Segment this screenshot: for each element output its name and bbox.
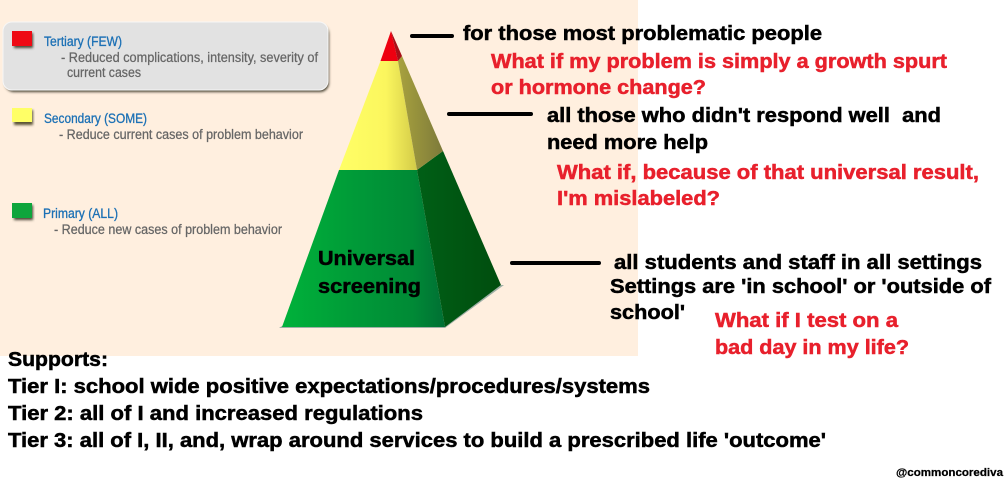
legend highlight box: tertiary — [3, 22, 329, 92]
text block: supports: Tier 2: all of I and increased regulations — [8, 403, 423, 425]
callout: mislabeled question: What if, because of that universal result, — [557, 162, 979, 184]
primary text — [43, 206, 282, 237]
tertiary text: Tertiary (FEW) — [44, 34, 122, 49]
text: bottom tier note — [610, 252, 991, 324]
text block: supports — [8, 349, 826, 452]
text: top tier note: for those most problematic people — [463, 23, 822, 45]
text: middle tier note — [547, 105, 941, 154]
callout: bad day question — [715, 310, 909, 359]
tier: red tertiary — [380, 31, 402, 61]
leader line: top tier — [412, 34, 452, 38]
callout: bad day question: What if I test on a — [715, 310, 899, 332]
callout: bad day question: bad day in my life? — [715, 337, 909, 359]
icon: red square — [12, 31, 33, 48]
pyramid label — [318, 248, 421, 298]
tertiary text — [44, 34, 318, 80]
primary text: Primary (ALL) — [43, 206, 118, 221]
text: middle tier note: all those who didn't respond well and — [547, 105, 941, 127]
icon: yellow square — [12, 108, 33, 125]
secondary text — [44, 111, 303, 142]
pyramid base shadow — [279, 285, 504, 328]
leader line: middle tier — [449, 112, 531, 116]
credit: @commoncorediva — [896, 467, 1004, 479]
panel: legend — [3, 22, 329, 237]
pyramid label: Universal — [318, 248, 415, 270]
callout: growth spurt question: What if my problem is simply a growth spurt — [491, 51, 947, 73]
chart: pyramid — [279, 31, 504, 328]
text block: supports: Supports: — [8, 349, 108, 371]
text block: supports: Tier 3: all of I, II, and, wrap around services to build a prescribed life 'outcome' — [8, 430, 826, 452]
leader line: bottom tier — [512, 261, 599, 265]
tertiary text: current cases — [67, 65, 141, 80]
callout: growth spurt question: or hormone change? — [491, 77, 706, 99]
pyramid label: screening — [318, 276, 421, 298]
tertiary text: - Reduced complications, intensity, severity of — [61, 50, 318, 65]
secondary text: - Reduce current cases of problem behavior — [59, 127, 303, 142]
tier: yellow secondary — [339, 56, 443, 170]
text: bottom tier note: all students and staff in all settings — [614, 252, 982, 274]
text: bottom tier note: school' — [610, 302, 685, 324]
text block: supports: Tier I: school wide positive expectations/procedures/systems — [8, 376, 650, 398]
primary text: - Reduce new cases of problem behavior — [54, 222, 282, 237]
secondary text: Secondary (SOME) — [44, 111, 147, 126]
callout: mislabeled question — [557, 162, 979, 210]
text: middle tier note: need more help — [547, 132, 708, 154]
callout: growth spurt question — [491, 51, 947, 99]
tier: green primary — [282, 151, 501, 327]
callout: mislabeled question: I'm mislabeled? — [557, 188, 720, 210]
text: bottom tier note: Settings are 'in school' or 'outside of — [610, 276, 991, 298]
icon: green square — [12, 203, 33, 220]
peach background panel — [0, 0, 638, 356]
